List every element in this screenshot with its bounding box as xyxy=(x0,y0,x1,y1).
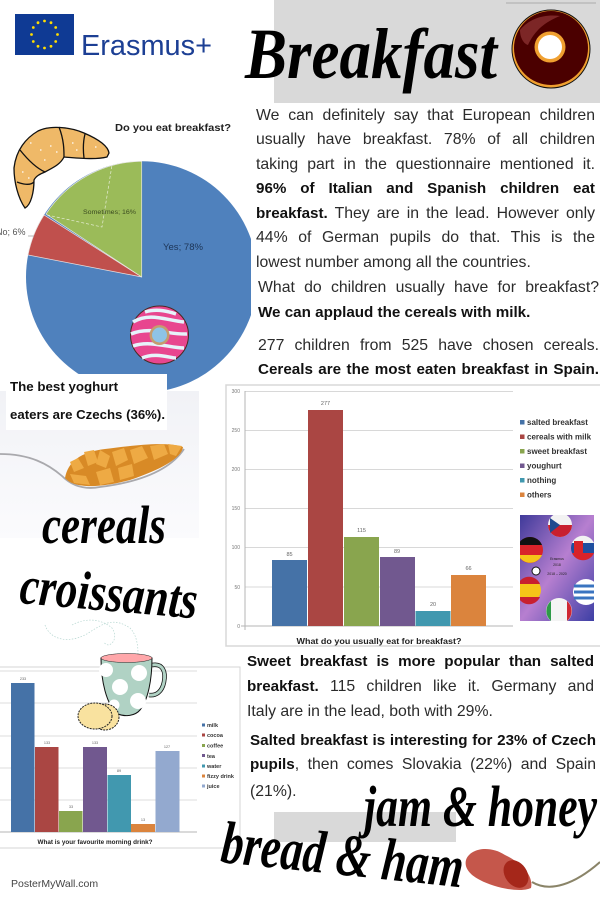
legend: breakfast chart: youghurt xyxy=(527,462,562,470)
legend: morning drink chart xyxy=(202,723,235,790)
text: 277 children from 525 have chosen cereals. xyxy=(258,337,599,354)
legend: breakfast chart: sweet breakfast xyxy=(527,447,587,456)
pie chart: do you eat breakfast: Sometimes; 16% xyxy=(83,209,136,216)
legend: morning drink chart: water xyxy=(206,764,222,770)
icon: salami on fork xyxy=(466,849,600,893)
bar chart: what do you usually eat for breakfast: 66 xyxy=(465,566,472,572)
bar chart: what is your favourite morning drink: 127 xyxy=(164,745,170,749)
icon: chocolate donut xyxy=(506,3,596,88)
text: 96% of Italian and Spanish children eat xyxy=(256,180,595,197)
flags poster xyxy=(520,515,594,621)
title background panel xyxy=(274,0,600,103)
text block: breakfast habits xyxy=(256,107,599,378)
bar chart: what do you usually eat for breakfast: 50 xyxy=(234,585,240,591)
lower grey panel xyxy=(274,812,456,842)
bar chart: what do you usually eat for breakfast: 277 xyxy=(321,401,330,407)
legend: morning drink chart: fizzy drink xyxy=(207,774,235,780)
text: We can applaud the cereals with milk. xyxy=(258,304,530,321)
bar chart: what is your favourite morning drink: 33 xyxy=(69,805,73,809)
text: Italy are in the lead, both with 29%. xyxy=(247,703,493,720)
legend: breakfast chart: cereals with milk xyxy=(527,432,592,442)
bar chart: what do you usually eat for breakfast: 150 xyxy=(232,506,240,512)
credit: PosterMyWall.com xyxy=(11,878,98,890)
logo: Erasmus+: Erasmus+ xyxy=(81,30,212,62)
text: lowest number among all the countries. xyxy=(256,254,531,271)
bar chart: what is your favourite morning drink: 133 xyxy=(92,741,98,745)
text: We can definitely say that European children xyxy=(256,107,595,124)
legend: breakfast chart: salted breakfast xyxy=(527,418,588,427)
text: breakfast. They are in the lead. However only xyxy=(256,205,595,222)
legend: morning drink chart: juice xyxy=(206,784,220,790)
script label: cereals: cereals xyxy=(42,495,166,555)
flags poster: 2018 xyxy=(553,563,561,567)
cereal photo background xyxy=(0,391,199,538)
legend: breakfast chart xyxy=(520,418,592,500)
pie chart: do you eat breakfast: Yes; 78% xyxy=(163,242,203,252)
pie chart: do you eat breakfast: Do you eat breakfast? xyxy=(115,122,231,134)
text: What do children usually have for breakfast? xyxy=(258,279,599,296)
bar chart: what is your favourite morning drink: 89 xyxy=(117,769,121,773)
bar chart: what do you usually eat for breakfast: 200 xyxy=(232,467,240,473)
legend: morning drink chart: milk xyxy=(207,723,219,729)
bar chart: what do you usually eat for breakfast: 100 xyxy=(232,545,240,551)
text: Cereals are the most eaten breakfast in Spain. xyxy=(258,361,599,378)
flags poster: 2018 – 2020 xyxy=(547,572,567,576)
legend: breakfast chart: others xyxy=(527,490,552,500)
icon: pink donut xyxy=(130,306,188,364)
pie chart: do you eat breakfast xyxy=(0,122,257,393)
bar chart: what do you usually eat for breakfast: What do you usually eat for breakfast? xyxy=(296,636,462,646)
script label: croissants: croissants xyxy=(18,555,200,630)
text: pupils, then comes Slovakia (22%) and Spain xyxy=(250,756,596,773)
text: (21%). xyxy=(250,783,297,800)
bar chart: what do you usually eat for breakfast: 85 xyxy=(286,552,293,558)
text block: sweet breakfast xyxy=(247,653,594,720)
flags poster: Erasmus xyxy=(550,557,564,561)
bar chart: what is your favourite morning drink: 13 xyxy=(141,818,145,822)
yoghurt callout: The best yoghurt xyxy=(10,379,119,394)
icon: croissant xyxy=(14,127,109,208)
yoghurt callout: eaters are Czechs (36%). xyxy=(10,407,165,422)
text: usually have breakfast. 78% of all children xyxy=(256,131,595,148)
bar chart: what do you usually eat for breakfast: 115 xyxy=(357,528,366,534)
text block: salted breakfast xyxy=(250,732,596,800)
bar chart: what do you usually eat for breakfast: 250 xyxy=(232,428,240,434)
text: 44% of German pupils do that. This is the xyxy=(256,229,595,246)
legend: breakfast chart: nothing xyxy=(527,476,556,485)
bar chart: what do you usually eat for breakfast: 20 xyxy=(430,602,436,608)
title: Breakfast: Breakfast xyxy=(244,14,499,94)
yoghurt callout xyxy=(6,374,167,430)
legend: morning drink chart: coffee xyxy=(207,744,223,750)
bar chart: what do you usually eat for breakfast: 0 xyxy=(237,624,240,630)
bar chart: what do you usually eat for breakfast xyxy=(226,385,600,646)
bar chart: what do you usually eat for breakfast: 89 xyxy=(394,549,400,555)
icon: steam xyxy=(45,620,138,654)
text: Salted breakfast is interesting for 23% of Czech xyxy=(250,732,596,749)
icon: spoon with cereal xyxy=(0,444,184,488)
text: breakfast. 115 children like it. Germany and xyxy=(247,678,594,695)
text: Sweet breakfast is more popular than salted xyxy=(247,653,594,670)
icon: tea cup xyxy=(99,654,165,716)
icon: biscuits xyxy=(78,703,119,730)
legend: morning drink chart: cocoa xyxy=(207,733,224,739)
bar chart: what is your favourite morning drink xyxy=(0,667,240,848)
legend: morning drink chart: tea xyxy=(207,754,216,760)
logo: Erasmus+ xyxy=(15,14,212,62)
text: taking part in the questionnaire mentioned it. xyxy=(256,156,595,173)
bar chart: what is your favourite morning drink: 133 xyxy=(44,741,50,745)
bar chart: what is your favourite morning drink: What is your favourite morning drink? xyxy=(38,839,153,846)
bar chart: what is your favourite morning drink: 233 xyxy=(20,677,26,681)
bar chart: what do you usually eat for breakfast: 300 xyxy=(232,389,240,395)
